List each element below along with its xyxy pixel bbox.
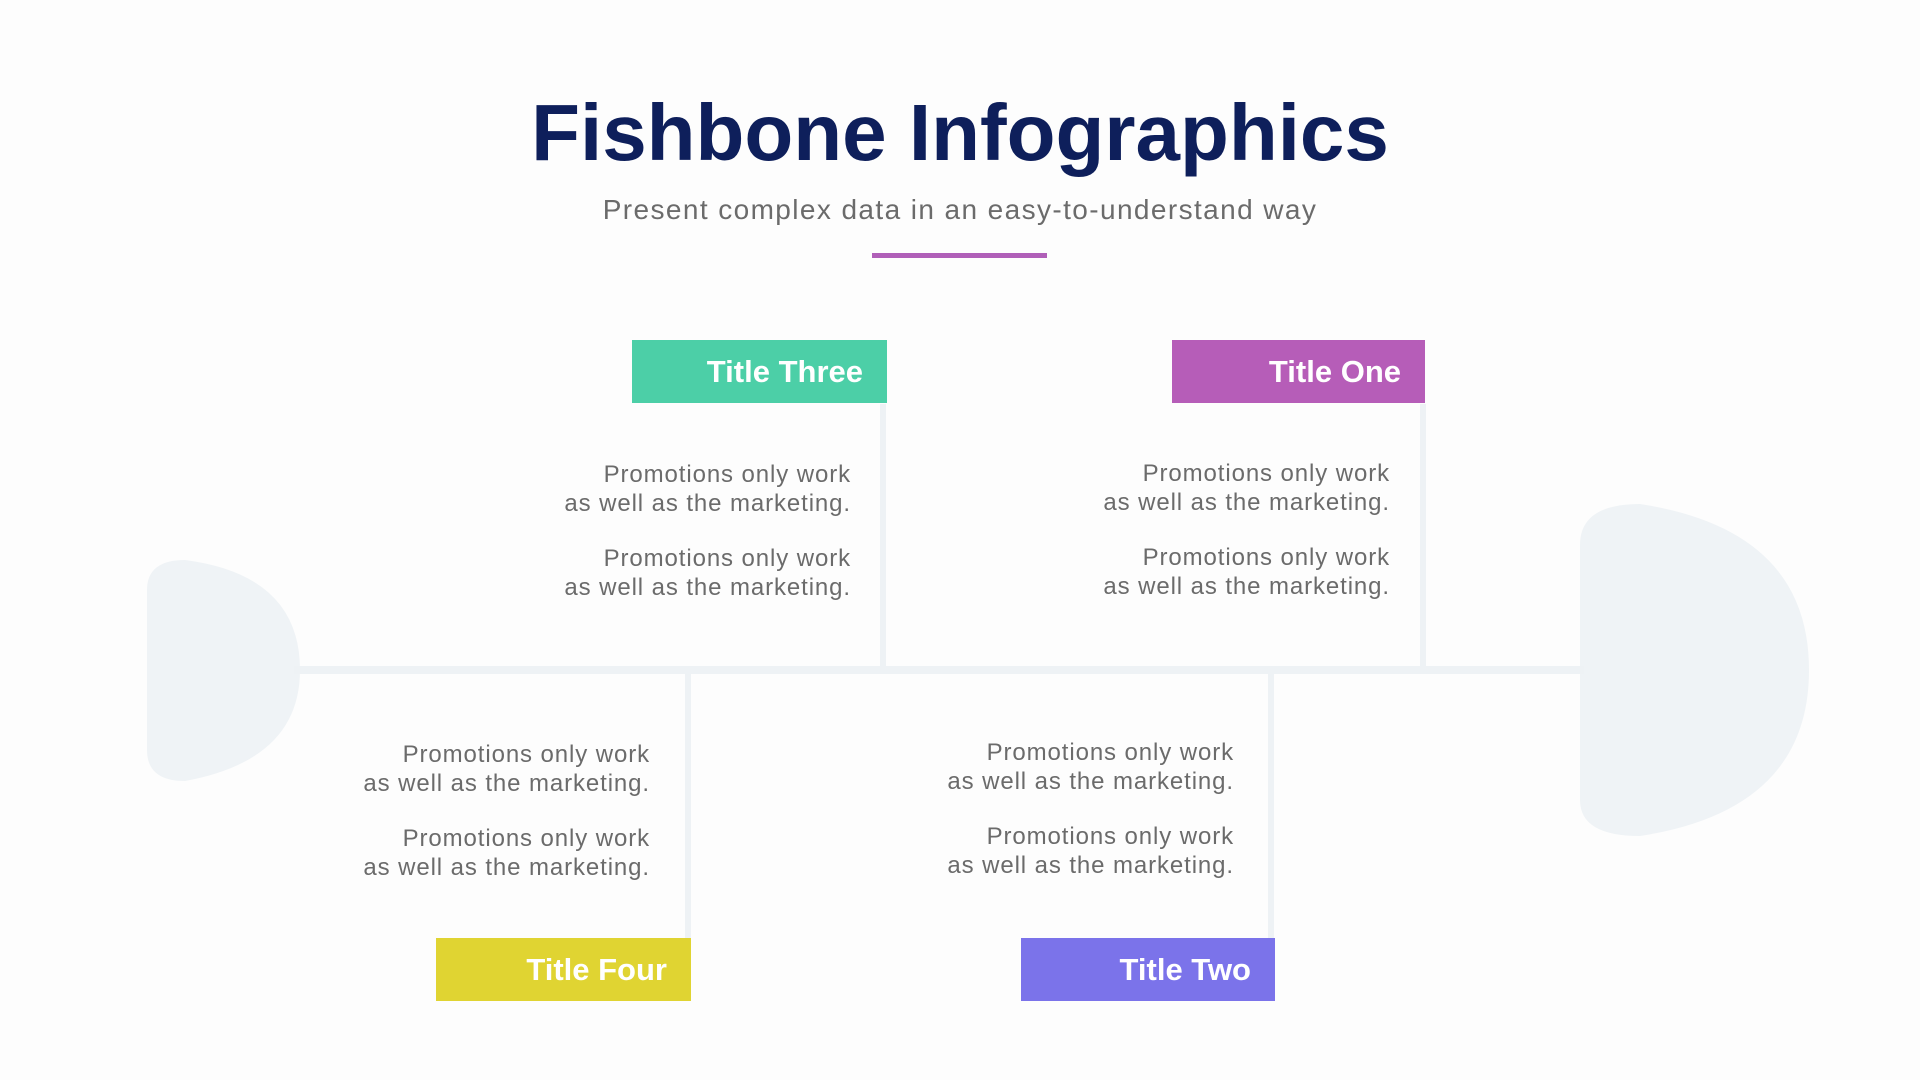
underline accent bbox=[872, 253, 1047, 258]
head bbox=[1580, 504, 1809, 836]
text: title three: as well as the marketing. bbox=[564, 490, 851, 517]
text: title two: Promotions only work bbox=[987, 739, 1234, 766]
subtitle: Present complex data in an easy-to-understand way bbox=[603, 194, 1317, 225]
text: title one bbox=[1103, 460, 1390, 600]
text: title one: as well as the marketing. bbox=[1103, 489, 1390, 516]
label: title two bbox=[1021, 938, 1275, 1001]
text: title three bbox=[564, 461, 851, 601]
text: title three: Promotions only work bbox=[604, 461, 851, 488]
label: title one: Title One bbox=[1269, 354, 1401, 389]
label: title four bbox=[436, 938, 691, 1001]
bone: title one bbox=[1420, 404, 1426, 670]
text: title four: Promotions only work bbox=[403, 825, 650, 852]
text: title one: as well as the marketing. bbox=[1103, 573, 1390, 600]
bone: title three bbox=[880, 404, 886, 670]
text: title two: as well as the marketing. bbox=[947, 768, 1234, 795]
label: title two: Title Two bbox=[1120, 952, 1251, 987]
text: title three: Promotions only work bbox=[604, 545, 851, 572]
text: title four: as well as the marketing. bbox=[363, 854, 650, 881]
text: title three: as well as the marketing. bbox=[564, 574, 851, 601]
text: title two bbox=[947, 739, 1234, 879]
spine bbox=[294, 666, 1584, 674]
label: title three: Title Three bbox=[707, 354, 863, 389]
text: title four: Promotions only work bbox=[403, 741, 650, 768]
label: title three bbox=[632, 340, 887, 403]
bone: title two bbox=[1268, 670, 1274, 938]
text: title four: as well as the marketing. bbox=[363, 770, 650, 797]
text: title two: as well as the marketing. bbox=[947, 852, 1234, 879]
label: title four: Title Four bbox=[526, 952, 667, 987]
label: title one bbox=[1172, 340, 1425, 403]
title: Fishbone Infographics bbox=[531, 88, 1389, 177]
tail bbox=[147, 560, 300, 781]
bone: title four bbox=[685, 670, 691, 938]
text: title one: Promotions only work bbox=[1143, 544, 1390, 571]
text: title two: Promotions only work bbox=[987, 823, 1234, 850]
text: title one: Promotions only work bbox=[1143, 460, 1390, 487]
text: title four bbox=[363, 741, 650, 881]
